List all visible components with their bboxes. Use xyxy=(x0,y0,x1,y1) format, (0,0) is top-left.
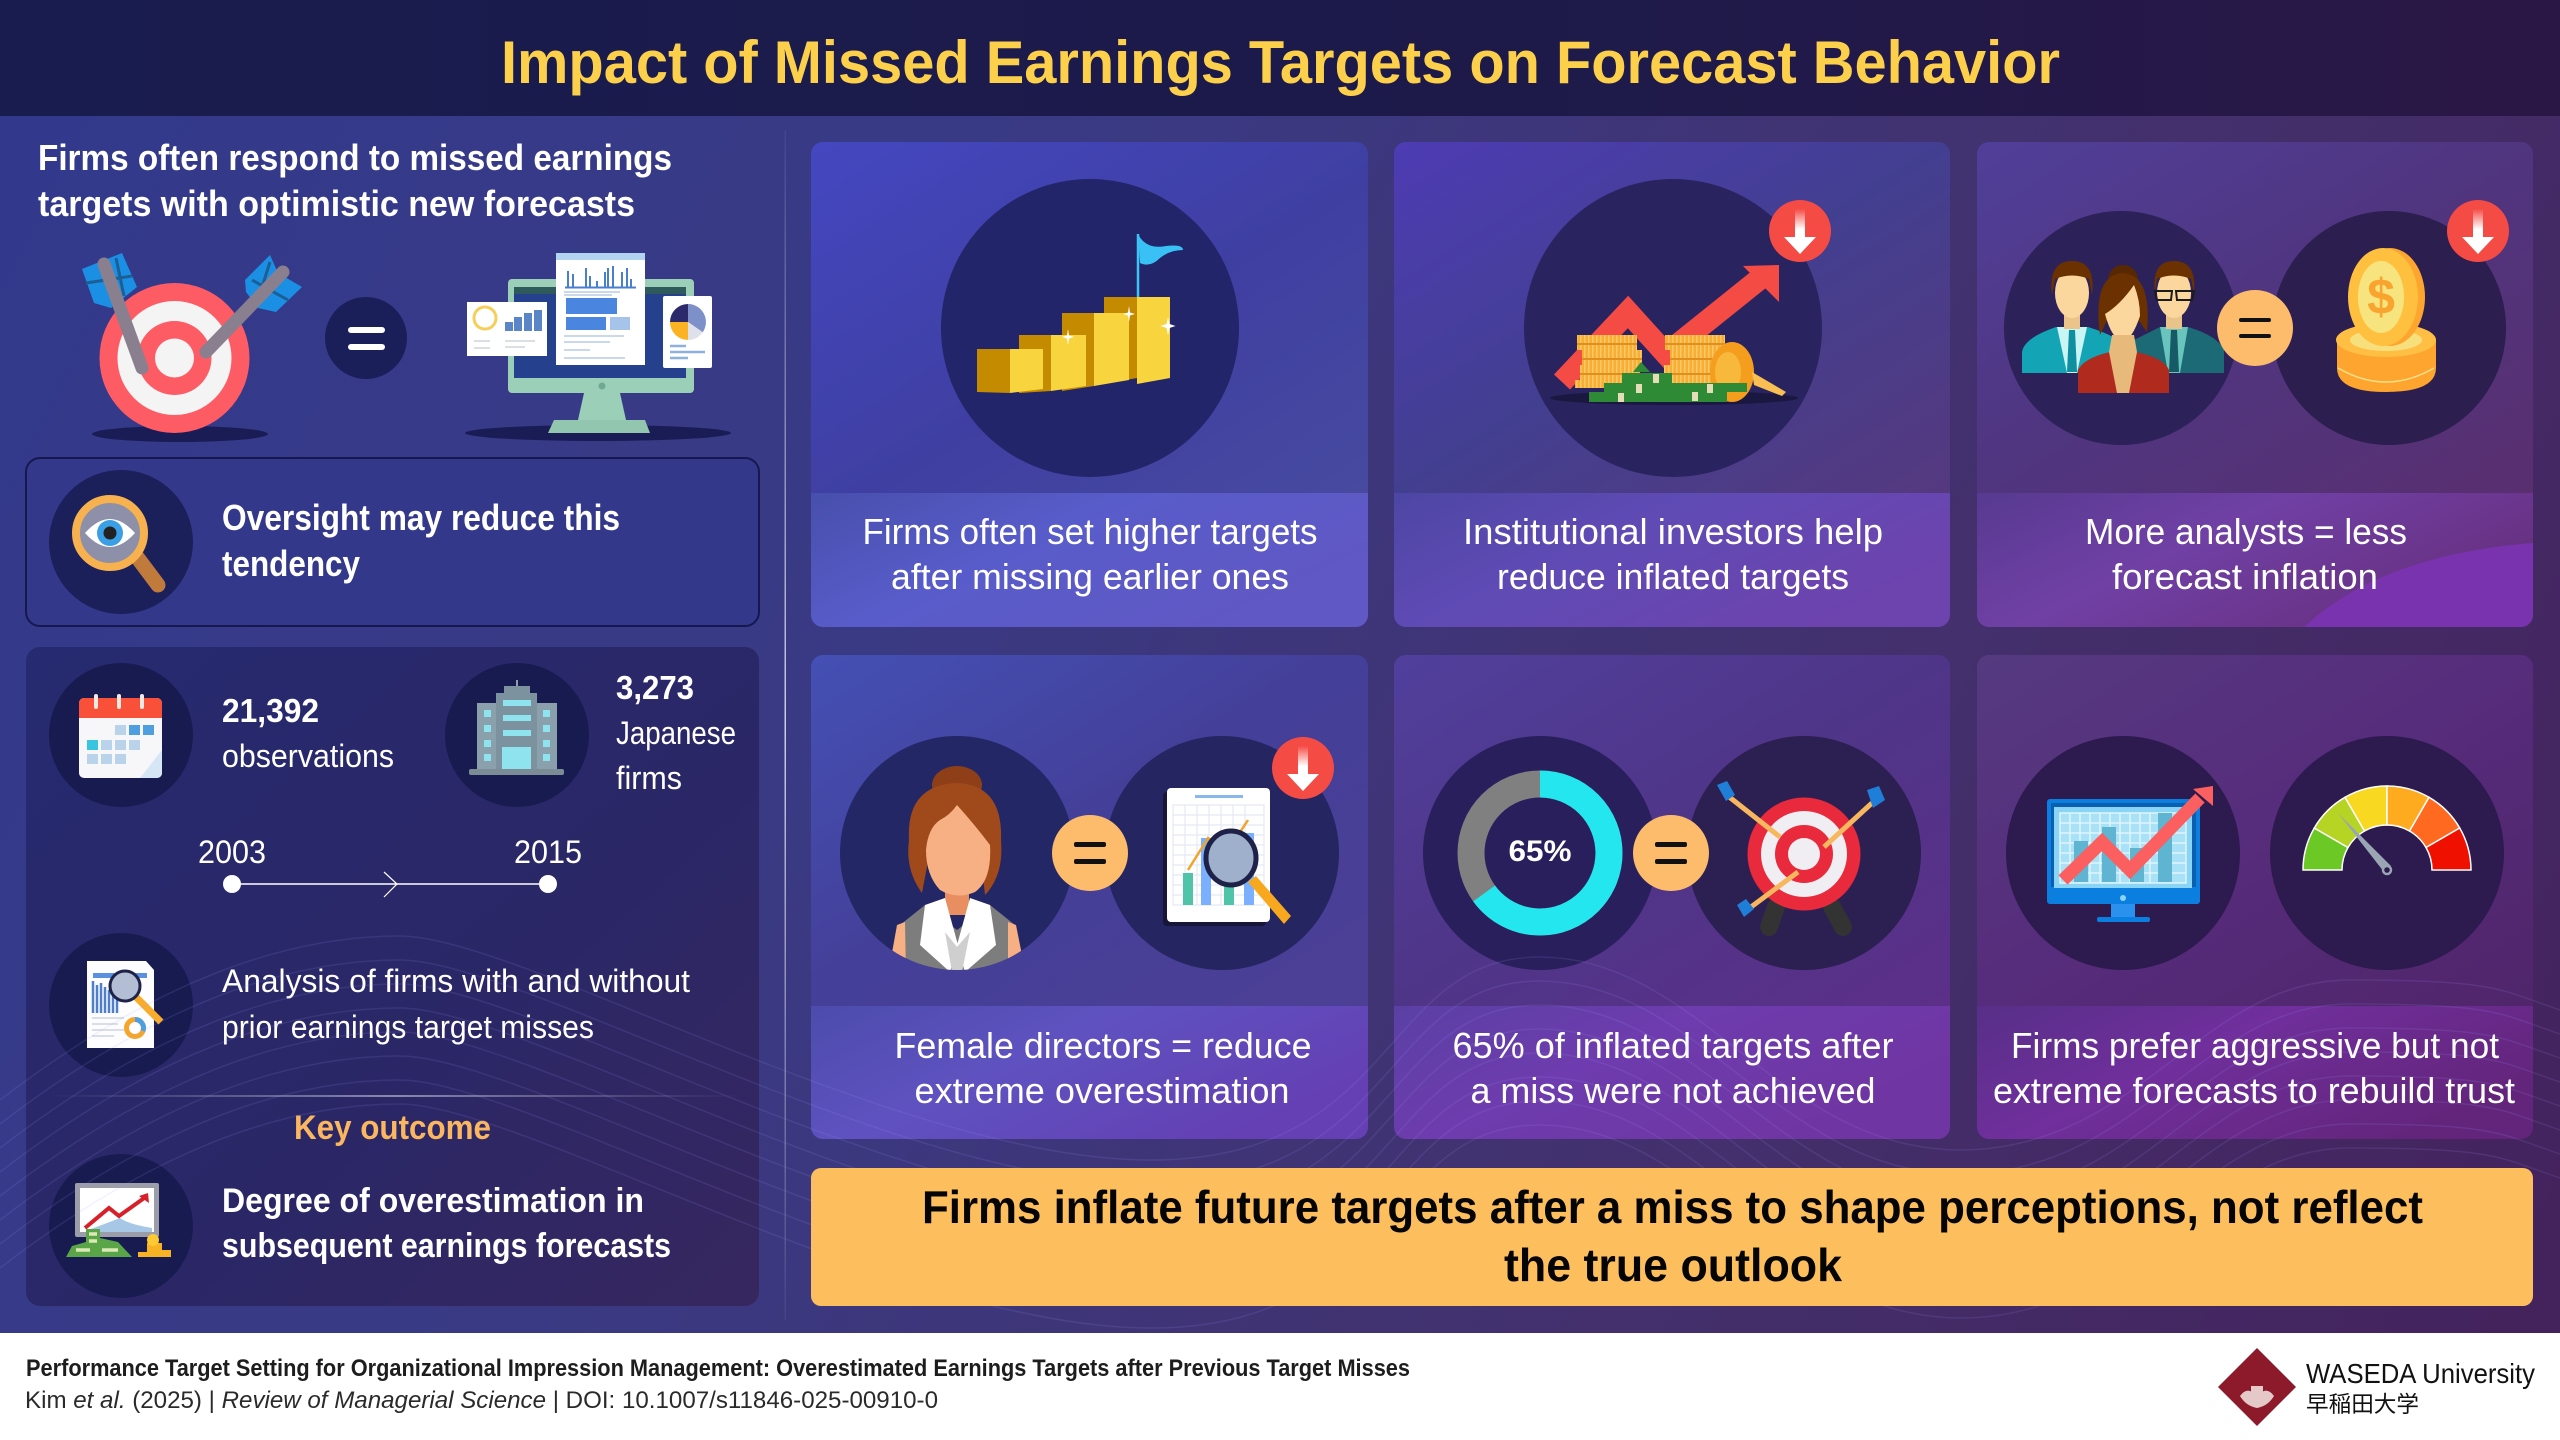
outcome text: subsequent earnings forecasts xyxy=(222,1227,671,1265)
icon: gold coins xyxy=(2272,211,2506,445)
icon: speedometer gauge xyxy=(2270,736,2504,970)
caption: More analysts = less xyxy=(2085,511,2407,552)
icon: monitor with rising chart xyxy=(2006,736,2240,970)
icon: monitor with reports xyxy=(465,253,731,441)
stat: observations: 21,392 xyxy=(222,692,319,729)
timeline 2003 to 2015 xyxy=(198,834,582,897)
timeline 2003 to 2015: 2003 xyxy=(198,834,266,870)
callout: key takeaway: Firms inflate future targets after a miss to shape perceptions, not reflect xyxy=(922,1181,2423,1233)
icon: red down badge xyxy=(1272,737,1334,799)
stat: firms: 3,273 xyxy=(616,669,694,706)
icon: equals sign xyxy=(325,297,407,379)
icon: group of analysts xyxy=(2004,211,2238,445)
footer xyxy=(0,1333,2560,1440)
chart: 65 percent donut xyxy=(1423,736,1657,970)
icon: zigzag arrow with coins and cash xyxy=(1524,179,1822,477)
stat: observations xyxy=(222,692,394,774)
caption: 65% of inflated targets after xyxy=(1452,1025,1894,1066)
caption xyxy=(1452,1025,1894,1111)
icon: target with darts xyxy=(1687,736,1921,970)
caption xyxy=(894,1025,1312,1111)
callout: key takeaway: the true outlook xyxy=(1504,1239,1842,1291)
panel: higher targets xyxy=(811,142,1368,627)
caption: Firms often set higher targets xyxy=(862,511,1318,552)
oversight text xyxy=(222,497,620,584)
caption xyxy=(1463,511,1883,597)
logo: Waseda University: 早稲田大学 xyxy=(2306,1392,2419,1417)
title banner: Impact of Missed Earnings Targets on Forecast Behavior xyxy=(501,29,2060,96)
stat: firms: Japanese xyxy=(616,715,736,751)
stat: firms xyxy=(616,669,736,796)
caption: Firms prefer aggressive but not xyxy=(2011,1025,2499,1066)
left column heading: targets with optimistic new forecasts xyxy=(38,183,635,224)
caption: Female directors = reduce xyxy=(894,1025,1312,1066)
oversight text: tendency xyxy=(222,543,360,584)
panel: female directors xyxy=(811,655,1368,1139)
caption: Institutional investors help xyxy=(1463,511,1883,552)
caption: a miss were not achieved xyxy=(1470,1070,1876,1111)
panel: data and method xyxy=(26,647,759,1306)
icon: equals sign xyxy=(2217,290,2293,366)
key outcome label: Key outcome xyxy=(294,1109,491,1147)
icon: office building xyxy=(445,663,589,807)
icon: chart with money xyxy=(49,1154,193,1298)
panel: aggressive forecasts xyxy=(1977,655,2533,1139)
method text: Analysis of firms with and without xyxy=(222,963,690,999)
caption xyxy=(862,511,1318,597)
icon: calendar xyxy=(49,663,193,807)
stat: firms: firms xyxy=(616,760,682,796)
caption xyxy=(2085,511,2407,597)
oversight text: Oversight may reduce this xyxy=(222,497,620,538)
outcome text: Degree of overestimation in xyxy=(222,1182,644,1220)
title banner xyxy=(0,0,2560,116)
panel: oversight xyxy=(26,458,759,626)
panel: institutional investors xyxy=(1394,142,1950,627)
caption: extreme forecasts to rebuild trust xyxy=(1993,1070,2515,1111)
left column heading: Firms often respond to missed earnings xyxy=(38,137,672,178)
logo: Waseda University: WASEDA University xyxy=(2306,1358,2535,1389)
citation: Performance Target Setting for Organizational Impression Management: Overestimated Earnings Targets after Previous Target Misses xyxy=(26,1355,1410,1382)
citation xyxy=(25,1355,1410,1414)
icon: rising gold bars with flag xyxy=(941,179,1239,477)
citation: Kim et al. (2025) | Review of Managerial Science | DOI: 10.1007/s11846-025-00910-0 xyxy=(25,1387,938,1414)
chart: 65 percent donut: 65% xyxy=(1508,835,1572,868)
timeline 2003 to 2015: 2015 xyxy=(514,834,582,870)
left column heading xyxy=(38,137,672,224)
icon: equals sign xyxy=(1633,815,1709,891)
icon: female director xyxy=(840,736,1074,975)
icon: target with arrows xyxy=(82,253,302,442)
caption xyxy=(1993,1025,2515,1111)
caption: forecast inflation xyxy=(2112,556,2378,597)
icon: red down badge xyxy=(2447,200,2509,262)
icon: red down badge xyxy=(1769,200,1831,262)
panel: more analysts xyxy=(1977,142,2533,627)
icon: eye in magnifier xyxy=(49,470,193,614)
caption: after missing earlier ones xyxy=(891,556,1289,597)
method text: prior earnings target misses xyxy=(222,1009,594,1045)
method text xyxy=(222,963,690,1045)
caption: reduce inflated targets xyxy=(1497,556,1849,597)
callout: key takeaway xyxy=(811,1168,2533,1306)
panel: unachieved targets xyxy=(1394,655,1950,1139)
icon: report analysis xyxy=(49,933,193,1077)
icon: gold coins: $ xyxy=(2367,269,2395,325)
outcome text xyxy=(222,1182,671,1265)
caption: extreme overestimation xyxy=(914,1070,1290,1111)
icon: report under magnifier xyxy=(1105,736,1339,970)
stat: observations: observations xyxy=(222,738,394,774)
icon: equals sign xyxy=(1052,815,1128,891)
logo: Waseda University xyxy=(2218,1348,2535,1426)
